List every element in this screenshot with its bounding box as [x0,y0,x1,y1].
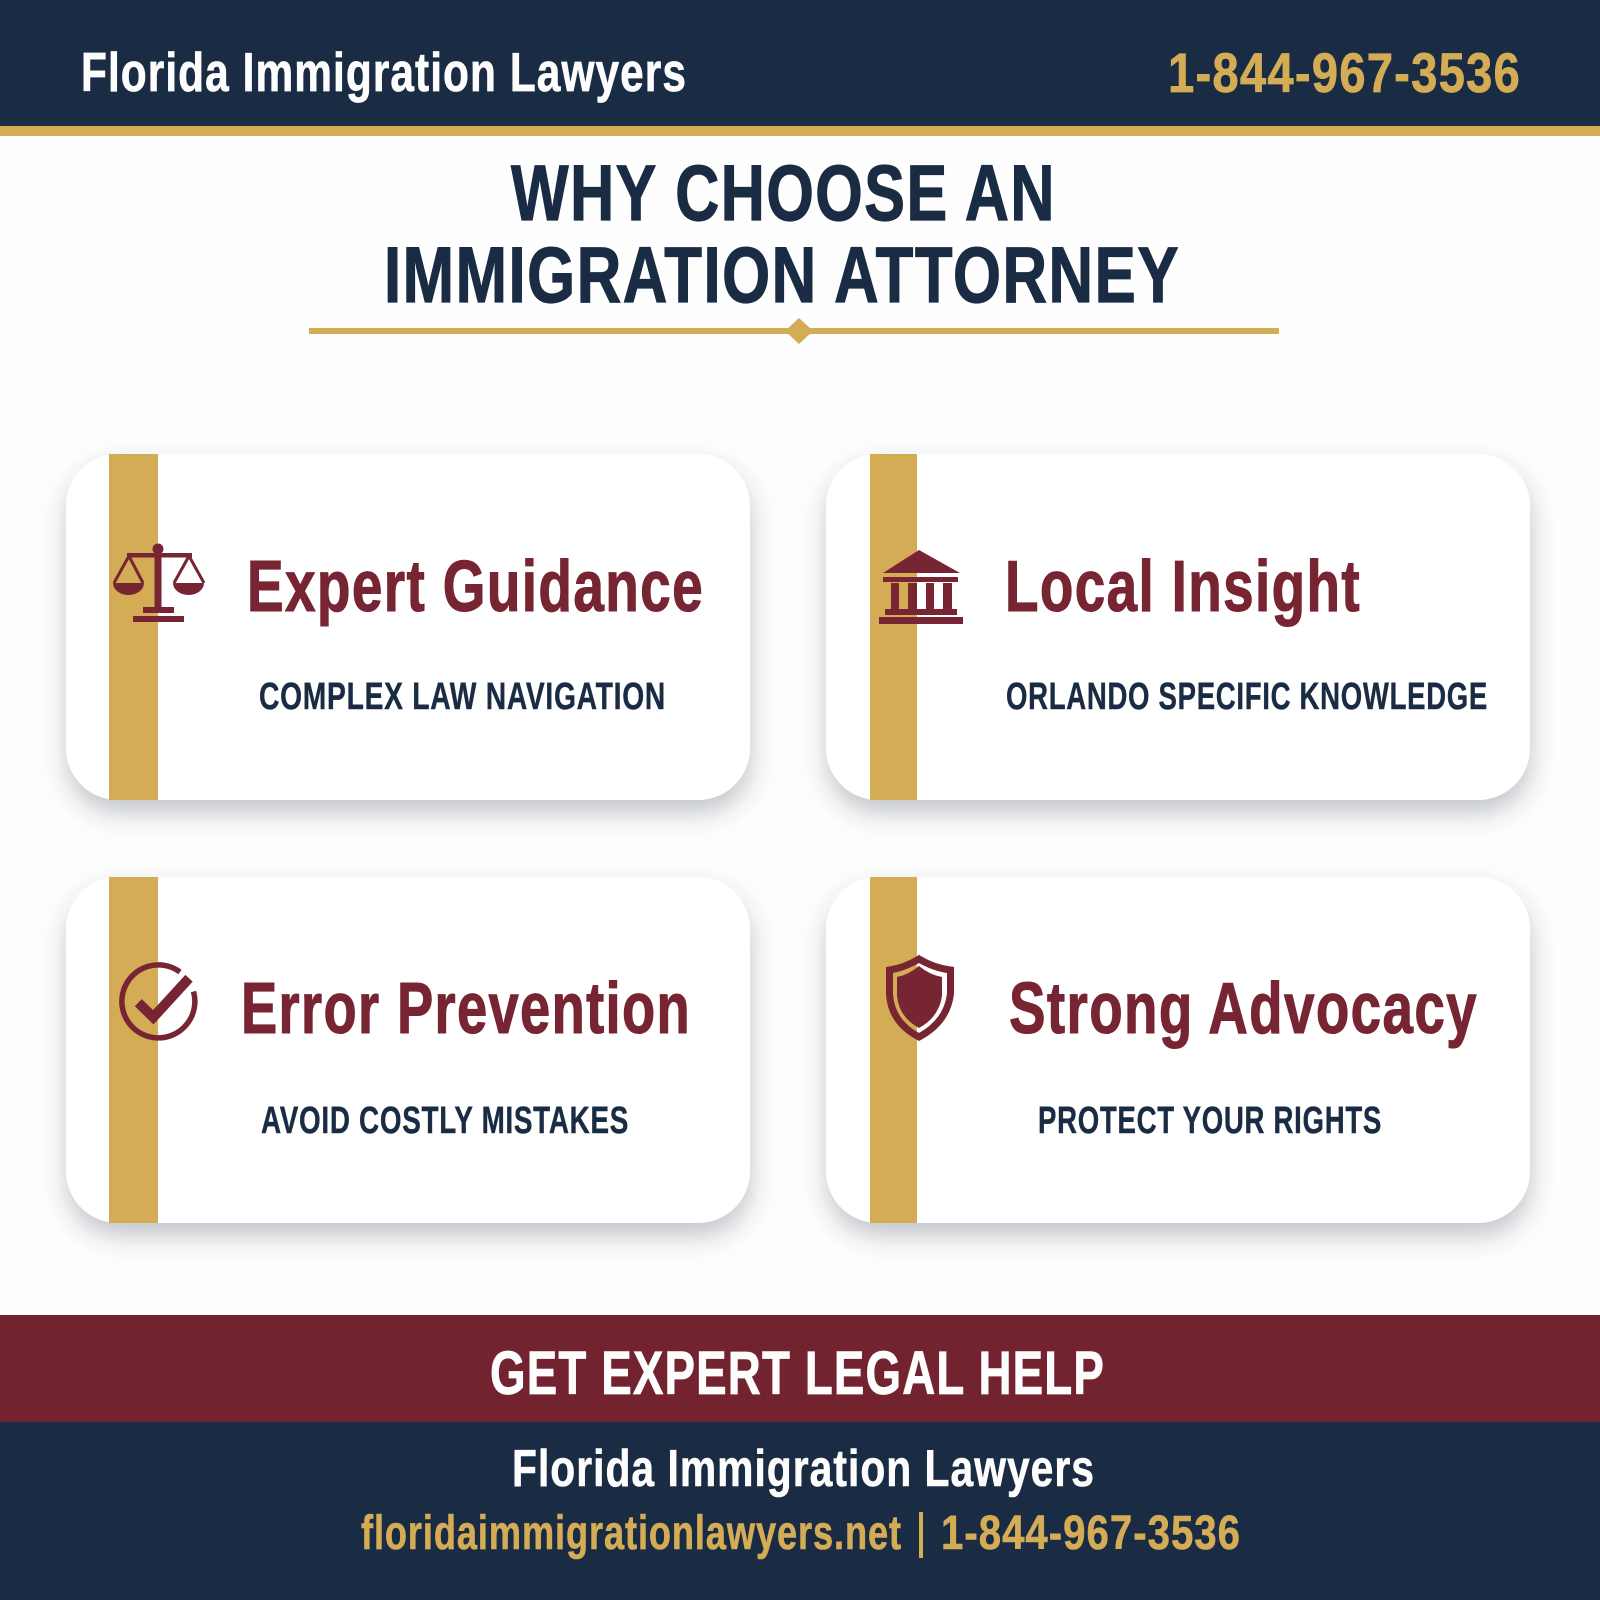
main title: IMMIGRATION ATTORNEY [384,230,1180,319]
main title: WHY CHOOSE AN [511,148,1056,237]
footer band [0,1422,1600,1600]
card subheading: COMPLEX LAW NAVIGATION [259,676,666,718]
card subheading: AVOID COSTLY MISTAKES [261,1100,629,1142]
call to action band: GET EXPERT LEGAL HELP [490,1339,1105,1407]
footer website and phone: 1-844-967-3536 [941,1507,1241,1560]
icon: scales of justice [113,544,204,622]
card heading: Expert Guidance [247,547,704,627]
title divider with diamond [309,318,1279,344]
header phone number: 1-844-967-3536 [1168,41,1521,104]
icon: courthouse [879,550,963,624]
card heading: Error Prevention [241,969,691,1049]
panel: expert guidance [66,454,750,800]
main title [384,148,1180,319]
header band [0,0,1600,136]
icon: shield [890,959,950,1037]
panel: error prevention [66,877,750,1223]
footer website and phone: floridaimmigrationlawyers.net [361,1507,902,1560]
panel: local insight [826,454,1530,800]
card subheading: PROTECT YOUR RIGHTS [1038,1100,1382,1142]
card heading: Local Insight [1005,547,1361,627]
panel: strong advocacy [826,877,1530,1223]
header firm name: Florida Immigration Lawyers [81,41,687,103]
icon: check mark in circle [122,965,195,1038]
call to action band [0,1315,1600,1422]
footer firm name: Florida Immigration Lawyers [512,1440,1095,1498]
